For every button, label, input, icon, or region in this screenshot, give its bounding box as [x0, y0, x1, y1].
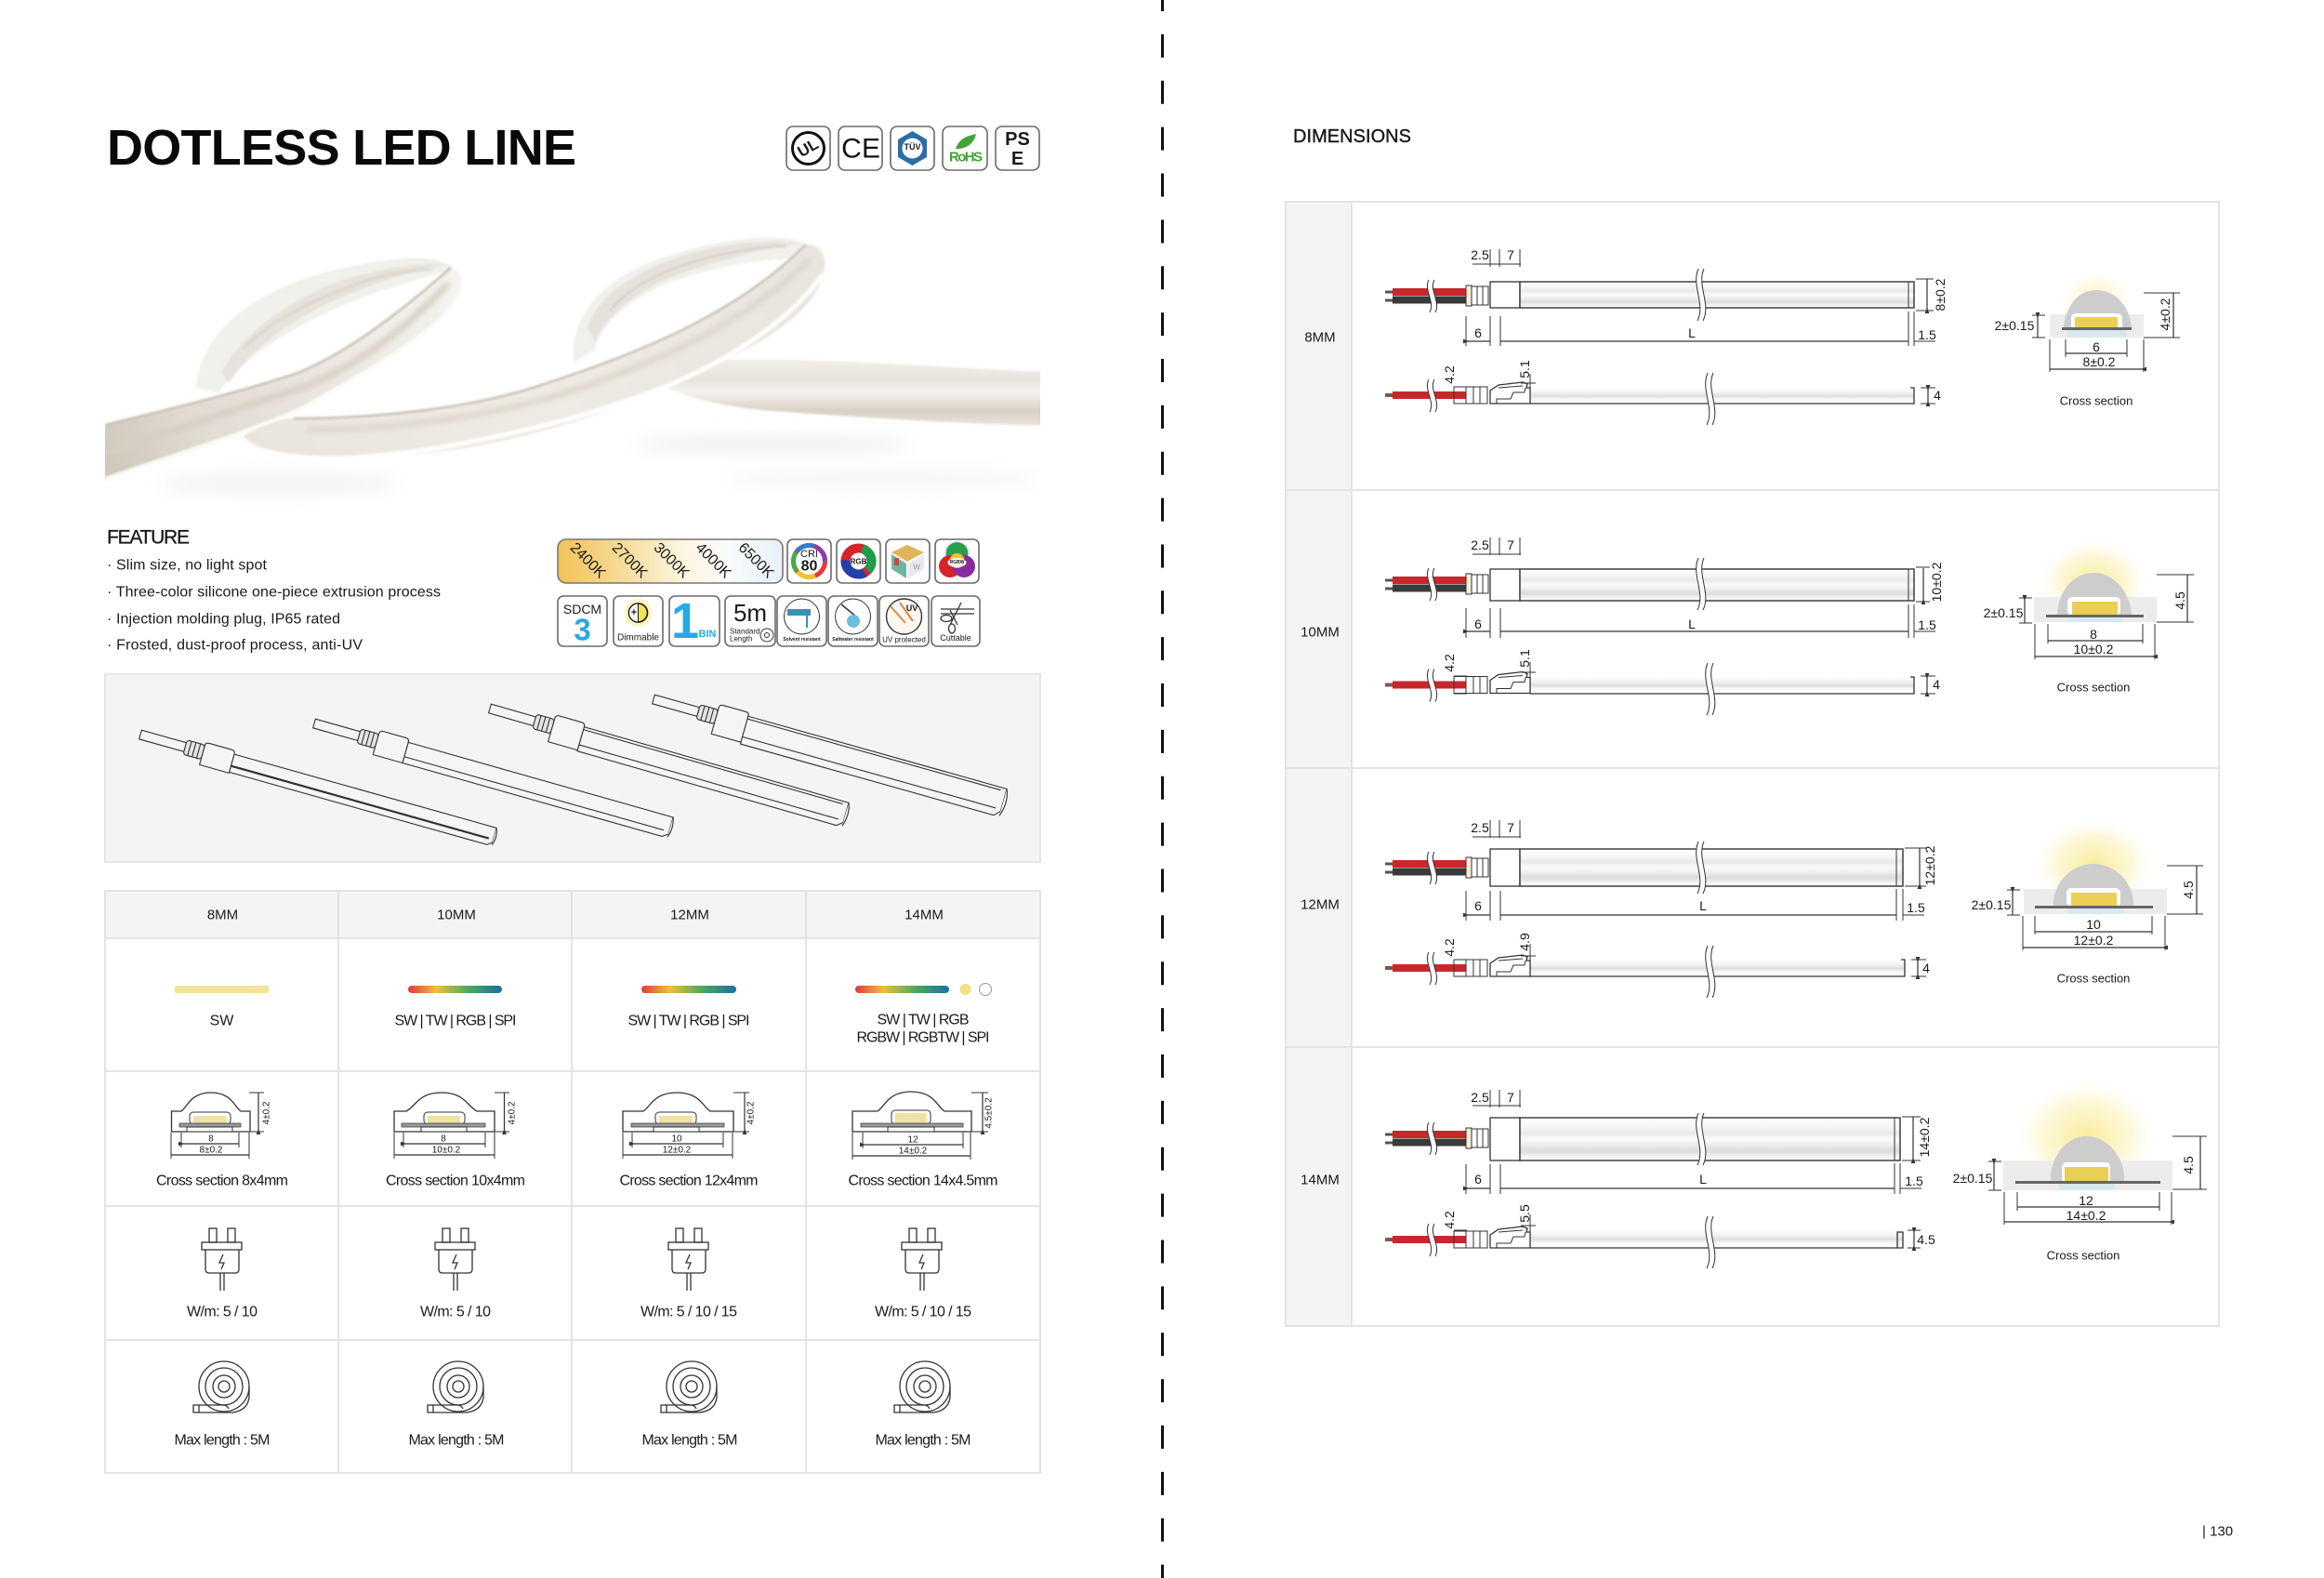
drawing: 10mm top view: L: [1688, 617, 1696, 631]
cross section 8x4: 4±0.2: [262, 1101, 271, 1124]
row: cross sections: [156, 1092, 998, 1188]
row: colour options: [175, 984, 991, 1045]
table header row: 8MM: [207, 908, 238, 922]
drawing: 8mm side view: [1385, 360, 1941, 425]
icon: RGBW: RGBW: [950, 560, 965, 565]
table header row: 12MM: [670, 908, 709, 922]
table header row: 10MM: [437, 908, 476, 922]
icon: RGBW: [935, 539, 979, 583]
cross section: 12mm: Cross section: [2057, 971, 2130, 986]
icon: 5m standard length: 5m: [733, 599, 767, 627]
drawing: 10mm side view: 4: [1933, 677, 1940, 692]
icon: salt water resistant: [828, 596, 878, 646]
icon: 5m standard length: Standard: [730, 627, 759, 636]
icon: colour temperature range: 3000K: [651, 540, 693, 582]
cross section: 14mm: 14±0.2: [2067, 1208, 2106, 1223]
cross section 10x4: 10±0.2: [432, 1146, 461, 1155]
icon: UV protected: UV protected: [882, 636, 926, 643]
icon: SDCM 3: 3: [574, 612, 591, 647]
drawing: 8mm top view: 7: [1507, 247, 1514, 262]
loop 1 back: [196, 259, 454, 392]
title: DOTLESS LED LINE: [107, 120, 576, 176]
front band: [93, 268, 461, 485]
table header row: [105, 891, 1040, 938]
plug 12mm: [640, 1228, 737, 1320]
12mm colour bar: [628, 986, 749, 1028]
icon: 5m standard length: [725, 596, 775, 646]
loop 2 back: [574, 238, 805, 363]
drawing: 12mm side view: 4.2: [1442, 938, 1457, 957]
drawing: 14mm top view: 1.5: [1905, 1174, 1923, 1188]
cross section 12x4: 10: [671, 1134, 682, 1144]
cross section 12x4: Cross section 12x4mm: [619, 1174, 759, 1188]
plug 8mm: W/m: 5 / 10: [187, 1304, 257, 1320]
drawing: 14mm top view: 7: [1507, 1090, 1514, 1105]
icon: TUV: [891, 126, 934, 170]
lower sweeping band: [244, 245, 825, 458]
cross section: 14mm: 2±0.15: [1953, 1171, 1993, 1186]
coil 10mm: [409, 1361, 504, 1449]
icon: cuttable: [931, 596, 980, 646]
icon: dimmable: Dimmable: [617, 632, 659, 643]
drawing: 14mm side view: 4.5: [1917, 1232, 1935, 1247]
coil 8mm: [175, 1361, 270, 1449]
icon: SDCM 3: SDCM: [563, 602, 601, 617]
cross section 14x4.5: [848, 1092, 998, 1188]
coil 14mm: [876, 1361, 971, 1449]
cross section: 14mm: 4.5: [2181, 1156, 2196, 1174]
drawing: 12mm side view: 4: [1922, 961, 1930, 975]
centre dashed fold line: [1161, 0, 1164, 1578]
icon: UV protected: UV: [906, 603, 918, 613]
plug 14mm: [875, 1228, 971, 1320]
cross section: 8mm: 8±0.2: [2083, 354, 2116, 369]
coil 14mm: Max length : 5M: [876, 1432, 971, 1449]
12mm colour bar: SW | TW | RGB | SPI: [628, 1014, 749, 1028]
icon: solvent resistant: [777, 596, 826, 646]
coil 8mm: Max length : 5M: [175, 1432, 270, 1449]
cross section: 14mm: [1953, 1079, 2207, 1263]
heading: dimensions: DIMENSIONS: [1293, 126, 1411, 147]
cross section: 12mm: [1972, 816, 2203, 986]
strip 8mm: [137, 724, 499, 847]
icon: UL: UL: [795, 135, 822, 161]
table grid: [105, 891, 1040, 1473]
feature item: · Slim size, no light spot: [107, 558, 268, 573]
icon: solvent resistant: Solvent resistant: [783, 637, 821, 643]
drawing: 12mm top view: 6: [1474, 898, 1482, 913]
icon: CE: C: [841, 134, 862, 164]
feature item: · Frosted, dust-proof process, anti-UV: [107, 638, 363, 653]
dimensions label column: [1286, 202, 1352, 1326]
icon: CE: [838, 126, 882, 170]
cross section: 14mm: 12: [2079, 1193, 2093, 1208]
row: wattage: [187, 1228, 971, 1320]
coil 12mm: [641, 1361, 738, 1449]
icon: cuttable: Cuttable: [940, 633, 971, 643]
row label 8mm: 8MM: [1304, 329, 1336, 346]
drawing: 14mm top view: [1385, 1090, 1932, 1194]
page number: | 130: [2202, 1523, 2233, 1540]
feature item: · Injection molding plug, IP65 rated: [107, 612, 340, 627]
icon: UL: [786, 126, 830, 170]
strip 12mm: [485, 697, 852, 828]
drawing: 10mm top view: [1385, 537, 1944, 638]
icon: CRI 80: CRI: [800, 549, 818, 560]
drawing: 12mm top view: 7: [1507, 820, 1514, 835]
icon: PSE: [996, 126, 1039, 170]
cross section 12x4: 4±0.2: [746, 1101, 757, 1124]
cross section: 8mm: Cross section: [2060, 394, 2133, 407]
row: max length: [175, 1361, 971, 1449]
drawing: 8mm top view: L: [1688, 325, 1696, 340]
drawing: 12mm top view: 12±0.2: [1922, 845, 1937, 885]
panel: product spec table: [105, 891, 1040, 1473]
icon: CRI 80: 80: [801, 558, 818, 575]
drawing: 14mm side view: 5.5: [1517, 1204, 1532, 1223]
drawing: 8mm side view: 4.2: [1442, 365, 1457, 384]
icon: RGB: RGB: [851, 558, 867, 565]
icon: SDCM 3: [558, 596, 607, 647]
icon: PSE: E: [1011, 149, 1023, 169]
panel: product line-up: [105, 674, 1040, 862]
icon: UV protected: [879, 596, 929, 646]
cross section: 8mm: 6: [2093, 339, 2100, 354]
cross section 10x4: [386, 1093, 525, 1188]
cross section 8x4: [156, 1093, 288, 1188]
cross section: 12mm: 4.5: [2181, 881, 2196, 899]
cross section: 14mm: Cross section: [2047, 1248, 2119, 1263]
8mm colour bar: SW: [210, 1014, 234, 1028]
tail band: [651, 360, 1046, 426]
icon: colour cube: W: [913, 564, 920, 571]
hero photo: LED strip loops: [93, 238, 1046, 497]
row label 12mm: 12MM: [1301, 896, 1340, 913]
cross section: 12mm: 12±0.2: [2074, 933, 2114, 948]
drawing: 10mm top view: 1.5: [1918, 617, 1936, 632]
drawing: 12mm top view: [1385, 820, 1937, 921]
drawing: 10mm top view: 10±0.2: [1929, 562, 1944, 602]
14mm colour bar: RGBW | RGBTW | SPI: [857, 1030, 989, 1045]
drawing: 8mm top view: [1385, 247, 1948, 346]
plug 12mm: W/m: 5 / 10 / 15: [640, 1304, 737, 1320]
cross section: 10mm: [1984, 538, 2194, 694]
drawing: 14mm side view: [1385, 1204, 1935, 1268]
drawing: 8mm top view: 1.5: [1918, 327, 1936, 342]
drawing: 10mm side view: 4.2: [1442, 654, 1457, 672]
icon: TUV: TÜV: [904, 142, 920, 152]
icon: RoHS: RoHS: [949, 149, 983, 166]
drawing: 14mm top view: L: [1699, 1172, 1707, 1187]
icon: PSE: PS: [1005, 129, 1030, 150]
strip 14mm: [648, 687, 1010, 817]
plug 14mm: W/m: 5 / 10 / 15: [875, 1304, 971, 1320]
drawing: 14mm top view: 2.5: [1471, 1090, 1489, 1105]
cross section 10x4: 8: [441, 1134, 446, 1144]
drawing: 10mm side view: 5.1: [1517, 649, 1532, 668]
cross section 14x4.5: 4.5±0.2: [984, 1097, 995, 1129]
cross section 8x4: 8±0.2: [200, 1146, 223, 1155]
icon: colour temperature range: 4000K: [693, 540, 734, 582]
drawing: 8mm side view: 4: [1934, 388, 1941, 403]
cross section 8x4: Cross section 8x4mm: [156, 1174, 288, 1188]
drawing: 10mm top view: 6: [1474, 617, 1482, 631]
cross section: 8mm: 2±0.15: [1995, 318, 2035, 333]
coil 12mm: Max length : 5M: [641, 1432, 738, 1449]
drawing: 12mm top view: 2.5: [1471, 820, 1489, 835]
cross section 14x4.5: 12: [907, 1134, 918, 1146]
drawing: 14mm top view: 6: [1474, 1172, 1482, 1187]
drawing: 14mm side view: 4.2: [1442, 1211, 1457, 1229]
cross section 12x4: 12±0.2: [663, 1146, 692, 1155]
coil 10mm: Max length : 5M: [409, 1432, 504, 1449]
cross section: 10mm: Cross section: [2057, 681, 2130, 694]
certification icons: [786, 126, 1039, 170]
icon: colour temperature range: 2400K: [567, 540, 609, 582]
drawing: 8mm side view: 5.1: [1517, 360, 1532, 378]
icon: RoHS: [943, 126, 987, 170]
cross section 12x4: [619, 1093, 759, 1188]
cross section 14x4.5: 14±0.2: [899, 1146, 928, 1157]
14mm colour bar: SW | TW | RGB: [878, 1012, 969, 1028]
dimensions grid: [1286, 202, 2219, 1326]
drawing: 8mm top view: 6: [1474, 325, 1482, 340]
drawing: 12mm side view: [1385, 933, 1930, 998]
table header row: 14MM: [905, 908, 944, 922]
drawing: 12mm side view: 4.9: [1517, 933, 1532, 951]
heading: feature: FEATURE: [107, 526, 190, 549]
icon: dimmable: +: [631, 607, 637, 618]
icon: 5m standard length: Length: [730, 634, 752, 643]
feature list: [107, 558, 441, 653]
8mm colour bar: [175, 986, 269, 1028]
icon: colour temperature range: [558, 539, 783, 583]
feature item: · Three-color silicone one-piece extrusion process: [107, 584, 441, 601]
cross section 14x4.5: Cross section 14x4.5mm: [848, 1174, 998, 1188]
strip 10mm: [310, 712, 676, 839]
10mm colour bar: SW | TW | RGB | SPI: [394, 1014, 517, 1028]
icon: RGB: [837, 539, 880, 583]
10mm colour bar: [394, 986, 517, 1028]
icon: colour temperature range: 6500K: [735, 540, 777, 582]
row label 10mm: 10MM: [1301, 625, 1340, 640]
icon: colour cube: [886, 539, 930, 583]
drawing: 10mm top view: 2.5: [1471, 537, 1489, 552]
row label 14mm: 14MM: [1301, 1172, 1340, 1188]
cross section: 8mm: 4±0.2: [2158, 298, 2172, 330]
drawing: 14mm top view: 14±0.2: [1917, 1117, 1932, 1157]
cross section: 10mm: 4.5: [2172, 591, 2187, 610]
cross section: 12mm: 10: [2086, 917, 2101, 932]
cross section: 10mm: 10±0.2: [2074, 642, 2114, 656]
icon: dimmable: [614, 596, 663, 646]
cross section: 10mm: 2±0.15: [1984, 605, 2024, 620]
icon: salt water resistant: Saltwater resistant: [832, 637, 874, 643]
14mm colour bar: [855, 984, 991, 1045]
panel: dimensions table: [1286, 202, 2219, 1326]
drawing: 8mm top view: 2.5: [1471, 247, 1489, 262]
plug 10mm: [420, 1228, 491, 1320]
drawing: 12mm top view: 1.5: [1907, 900, 1925, 915]
drawing: 10mm top view: 7: [1507, 537, 1514, 552]
cross section 8x4: 8: [208, 1134, 214, 1144]
icon: CRI 80: [787, 539, 831, 583]
icon: 1 BIN: [669, 593, 720, 649]
icon: CE: E: [862, 134, 880, 164]
floor shadow: [191, 435, 889, 491]
cross section: 8mm: [1995, 270, 2180, 407]
drawing: 10mm side view: [1385, 649, 1940, 715]
plug 10mm: W/m: 5 / 10: [420, 1304, 491, 1320]
icon: 1 BIN: 1: [671, 593, 699, 649]
cross section 10x4: Cross section 10x4mm: [386, 1174, 525, 1188]
cross section: 10mm: 8: [2090, 627, 2097, 642]
drawing: 8mm top view: 8±0.2: [1933, 278, 1948, 311]
icon: colour temperature range: 2700K: [609, 540, 651, 582]
cross section 10x4: 4±0.2: [508, 1101, 517, 1124]
cross section: 12mm: 2±0.15: [1972, 897, 2012, 912]
feature icons: [558, 539, 980, 649]
drawing: 12mm top view: L: [1699, 898, 1707, 913]
icon: 1 BIN: BIN: [699, 629, 717, 640]
plug 8mm: [187, 1228, 257, 1320]
